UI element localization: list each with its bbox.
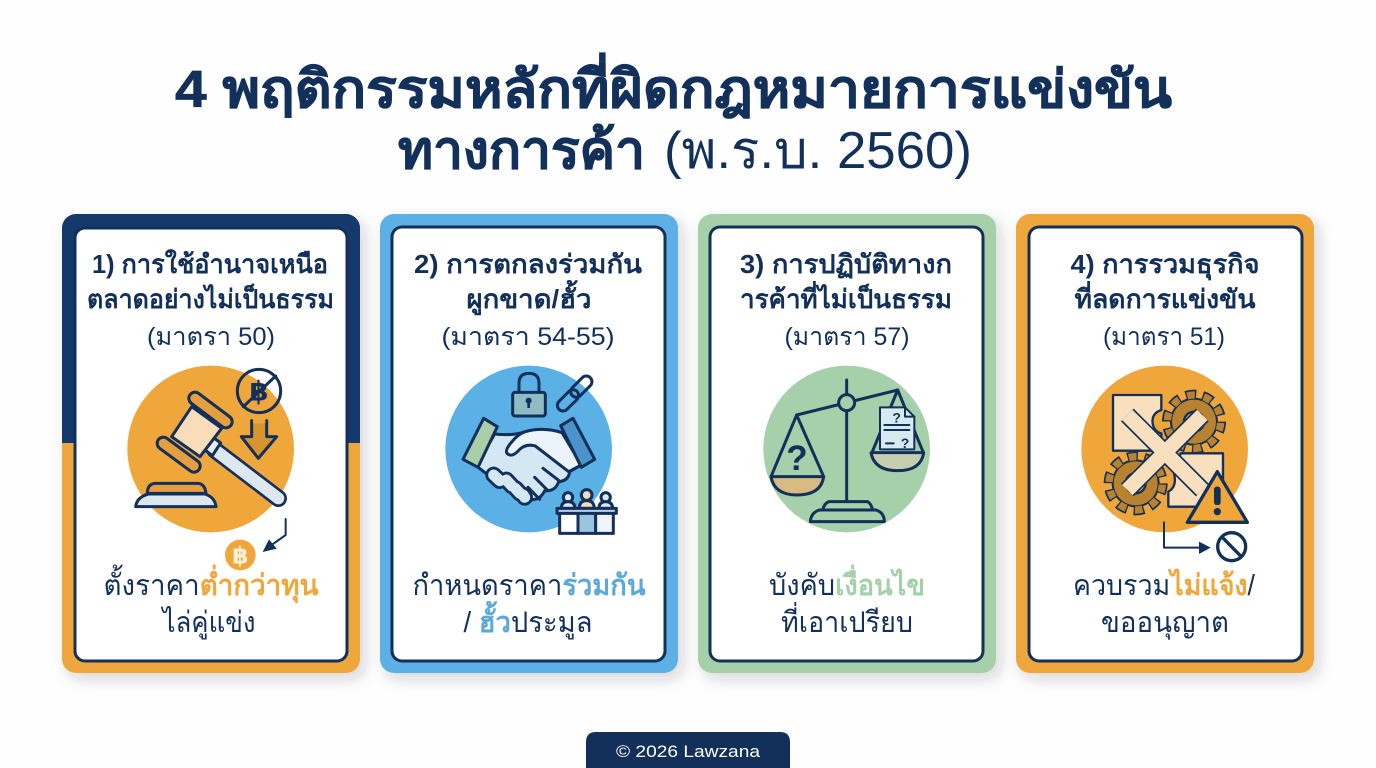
card 4 heading: ที่ลดการแข่งขัน [1074, 280, 1256, 314]
panel: card 2 collusion [380, 214, 678, 673]
card 3 caption line 2: ที่เอาเปรียบ [781, 602, 913, 639]
card 3 heading: 3) การปฏิบัติทางก [740, 249, 952, 279]
title: 4 พฤติกรรมหลักที่ผิดกฎหมายการแข่งขัน [175, 53, 1172, 119]
card 3 heading [740, 249, 952, 351]
icon: tilted scales with question marks: ? [892, 410, 901, 426]
panel: card 1 abuse of market power [62, 214, 360, 673]
icon: blocked merger puzzle, gears and warning [1081, 366, 1248, 561]
card 1 frame [62, 214, 360, 673]
card 2 caption: กำหนดราคาร่วมกัน [412, 570, 646, 602]
card 4 heading: (มาตรา 51) [1103, 323, 1225, 351]
icon: tilted scales with question marks: ? [786, 439, 808, 478]
card 1 caption line 2: ไล่คู่แข่ง [161, 605, 256, 640]
card 3 frame [698, 214, 996, 673]
card 4 caption: ควบรวมไม่แจ้ง/ [1073, 568, 1256, 602]
card 2 frame [380, 214, 678, 673]
footer badge: © 2026 Lawzana [616, 742, 761, 761]
card 4 heading: 4) การรวมธุรกิจ [1070, 249, 1260, 281]
card 2 heading [414, 249, 642, 351]
card 1 heading [87, 249, 334, 351]
icon: tilted scales with question marks: ? [901, 435, 909, 451]
footer badge [586, 732, 790, 768]
title: (พ.ร.บ. 2560) [664, 122, 972, 180]
icon: handshake with lock, chain and bidders [445, 366, 616, 533]
icon: gavel with no baht and falling price: ฿ [249, 376, 269, 407]
card 1 caption: ตั้งราคาต่ำกว่าทุน [104, 564, 319, 603]
icon: tilted scales with question marks [763, 366, 930, 532]
card 1 heading: 1) การใช้อำนาจเหนือ [92, 249, 328, 279]
card 3 heading: (มาตรา 57) [784, 323, 910, 351]
card 4 caption line 2: ขออนุญาต [1101, 607, 1229, 640]
card 2 caption line 2: / ฮั้วประมูล [464, 600, 592, 640]
card 2 heading: 2) การตกลงร่วมกัน [414, 249, 642, 279]
card 3 caption: บังคับเงื่อนไข [769, 564, 925, 602]
card 2 heading: (มาตรา 54-55) [442, 323, 614, 351]
title: ทางการค้า [398, 122, 645, 180]
card 4 heading [1070, 249, 1260, 351]
panel: card 4 mergers [1016, 214, 1314, 673]
card 3 heading: ารค้าที่ไม่เป็นธรรม [740, 280, 952, 314]
panel: card 3 unfair trade practices [698, 214, 996, 673]
icon: gavel with no baht and falling price: ฿ [232, 542, 248, 568]
card 2 heading: ผูกขาด/ฮั้ว [466, 279, 592, 316]
card 4 frame [1016, 214, 1314, 673]
icon: gavel with no baht and falling price [127, 366, 294, 570]
card 1 heading: ตลาดอย่างไม่เป็นธรรม [87, 283, 334, 314]
title [175, 53, 1172, 180]
card 1 heading: (มาตรา 50) [147, 323, 275, 351]
